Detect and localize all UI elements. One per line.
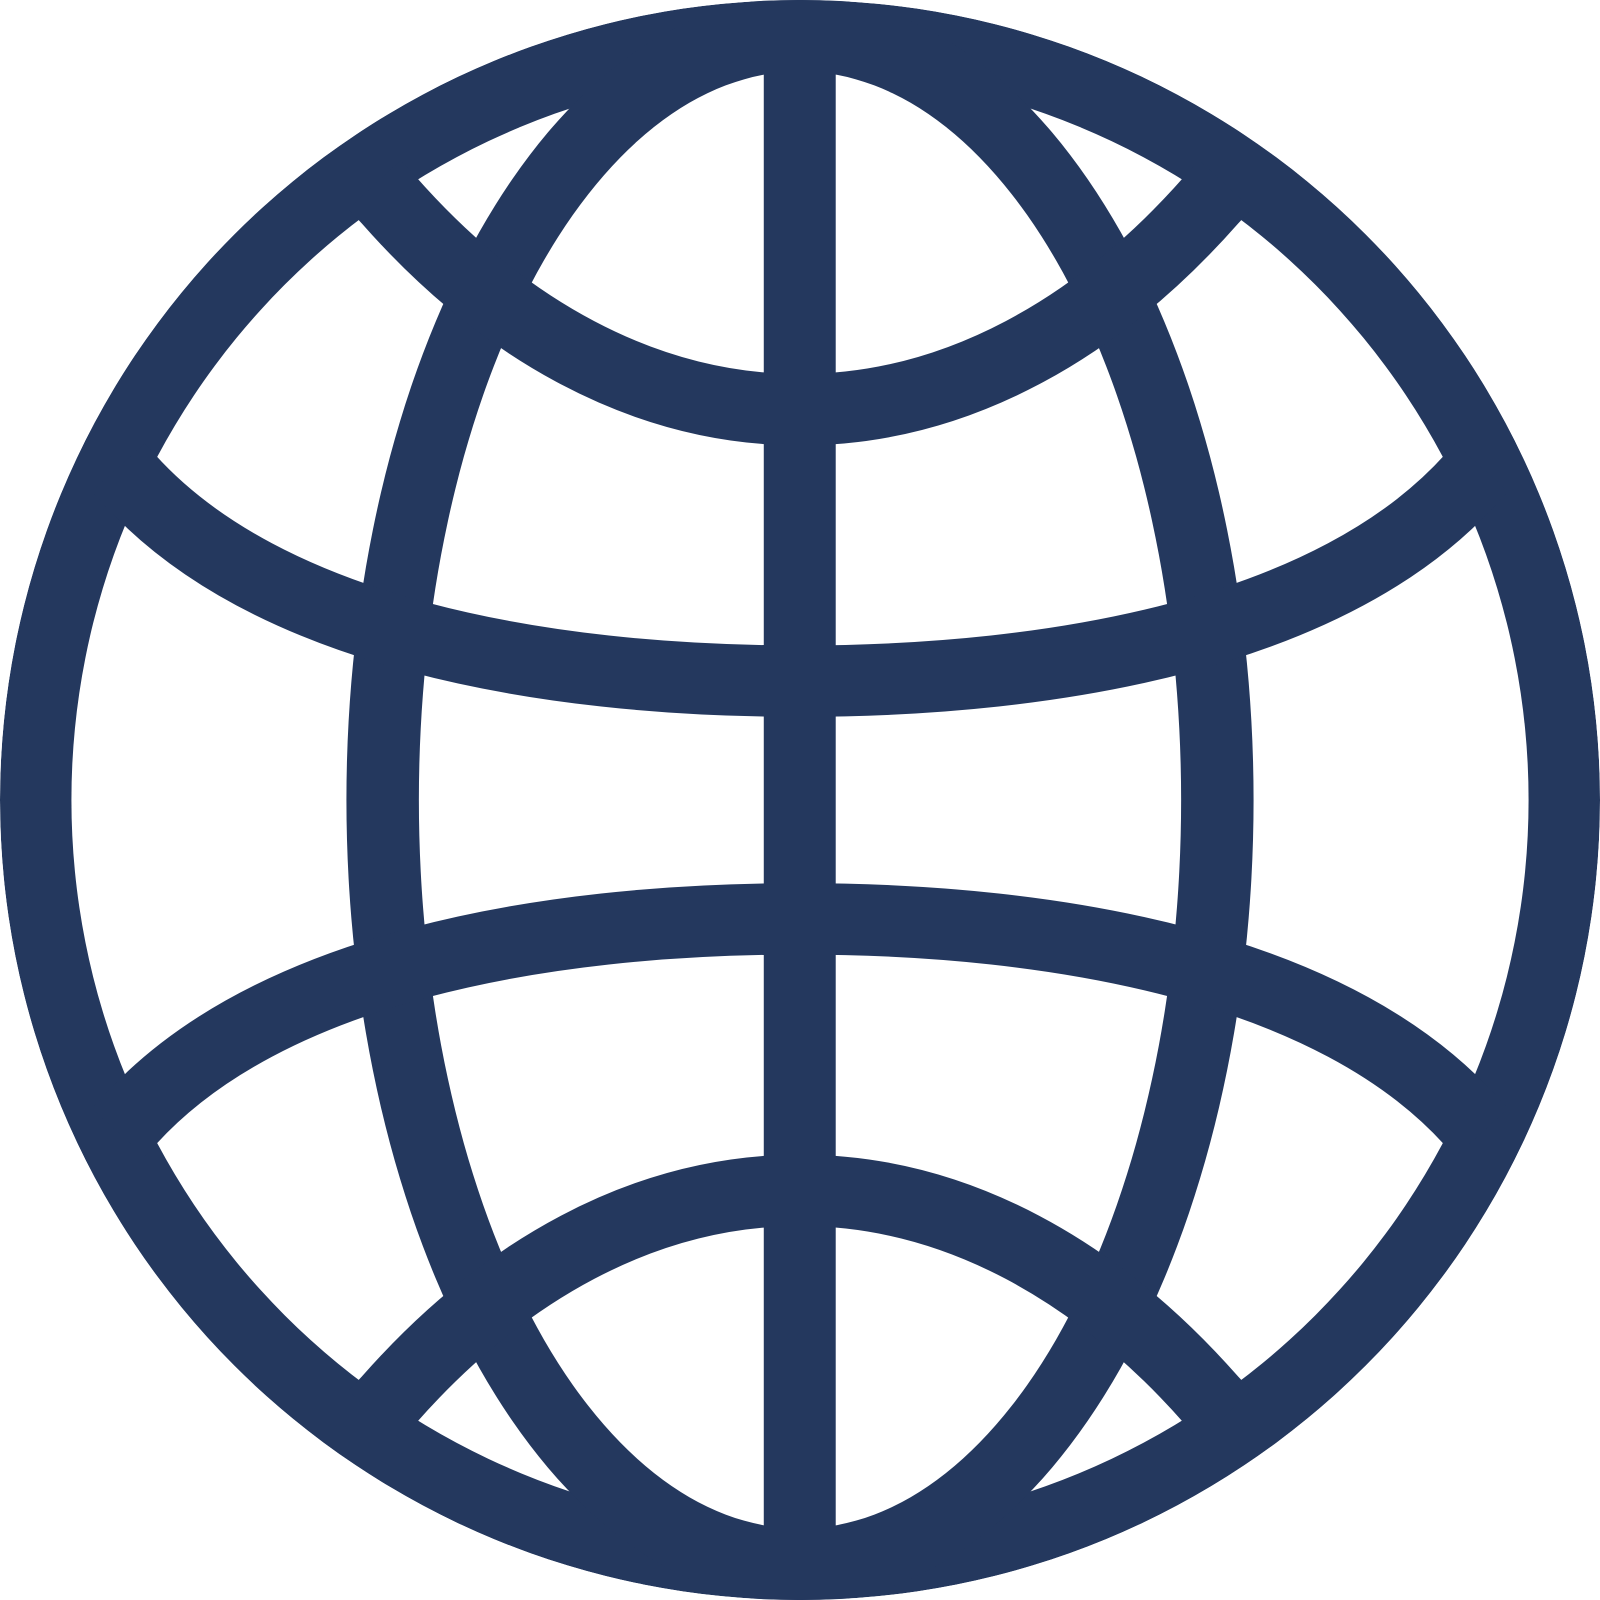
upper-middle arc <box>118 467 1482 681</box>
latitude arcs <box>118 185 1482 1415</box>
lower arc <box>374 1190 1226 1415</box>
central vertical meridian <box>764 31 836 1569</box>
upper arc <box>374 185 1226 410</box>
lower-middle arc <box>118 919 1482 1133</box>
meridian ellipse <box>346 0 1254 1600</box>
